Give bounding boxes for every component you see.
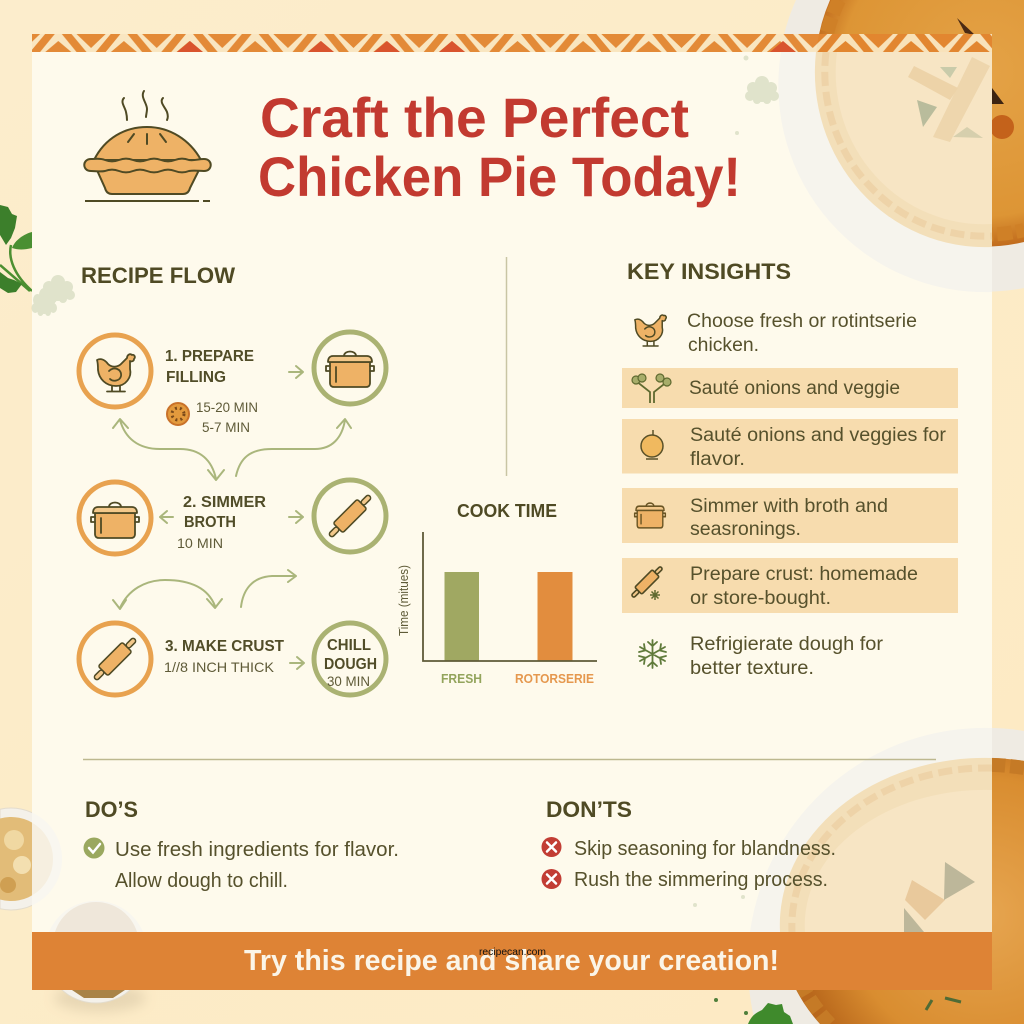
panel: don'ts: DON’TS [546,797,632,822]
icon: steaming pie [84,91,211,201]
insight 2: vegetables [622,368,958,408]
step 1: prepare filling: FILLING [166,369,226,386]
insight 1: chicken: chicken. [688,335,759,356]
step 1: prepare filling: 5-7 MIN [202,419,250,435]
photo: cilantro sprigs [0,205,793,1024]
vertical divider [506,257,508,476]
step 2: simmer broth: 10 MIN [177,535,223,551]
step 2: simmer broth: 2. SIMMER [183,494,266,511]
insight 3: onion: Sauté onions and veggies for [690,425,947,446]
bar chart: cook time: COOK TIME [457,501,557,521]
bar chart: cook time: ROTORSERIE [515,671,594,686]
step 2: simmer broth [79,480,386,554]
panel: do's: Allow dough to chill. [115,870,288,892]
panel: do's [84,797,399,892]
insight 5: rolling pin [622,558,958,613]
panel: don'ts [542,797,836,891]
step 3: make crust: 3. MAKE CRUST [165,638,285,655]
panel: do's: DO’S [85,797,138,822]
insight 5: rolling pin: Prepare crust: homemade [690,564,918,585]
title: Chicken Pie Today! [258,145,741,208]
bar chart: cook time: Time (mitues) [396,565,411,636]
step 2: simmer broth: BROTH [184,514,236,531]
insight 4: pot: Simmer with broth and [690,496,888,517]
step 1: prepare filling: 15-20 MIN [196,399,258,415]
heading: key insights: KEY INSIGHTS [627,259,791,284]
insight 4: pot: seasronings. [690,519,801,540]
step 3: make crust: 30 MIN [327,673,370,689]
panel: don'ts: Rush the simmering process. [574,869,828,891]
flow arrows between step 2 and 3 [113,570,296,609]
panel: don'ts: Skip seasoning for blandness. [574,838,836,860]
panel: do's: Use fresh ingredients for flavor. [115,839,399,861]
faded top right pie seen through panel [778,52,992,292]
insight 6: snowflake [639,634,884,679]
faded bottom right pie seen through panel [750,728,992,932]
flow arrows between step 1 and 2 [113,419,351,480]
step 3: make crust: CHILL [327,637,371,654]
insight 3: onion: flavor. [690,449,745,470]
horizontal divider [83,758,936,760]
step 3: make crust: 1//8 INCH THICK [164,659,275,675]
insight 4: pot [622,488,958,543]
bar chart: cook time: FRESH [441,671,482,686]
insight 5: rolling pin: or store-bought. [690,588,831,609]
insight 1: chicken [635,311,917,356]
faded bowls seen through panel [32,812,143,932]
call to action banner [32,932,992,990]
insight 3: onion [622,419,958,474]
photo: bowls of ingredients [0,808,147,1012]
title [258,86,741,208]
zigzag border [32,34,992,52]
step 3: make crust [79,623,386,695]
title: Craft the Perfect [260,86,689,149]
call to action banner: Try this recipe and share your creation! [244,945,779,977]
photo: bottom right pie on plate [748,728,1024,1024]
insight 6: snowflake: better texture. [690,658,814,679]
heading: recipe flow: RECIPE FLOW [81,263,235,288]
step 1: prepare filling: 1. PREPARE [165,348,254,365]
insight 1: chicken: Choose fresh or rotintserie [687,311,917,332]
insight 2: vegetables: Sauté onions and veggie [689,378,900,399]
insight 6: snowflake: Refrigierate dough for [690,634,884,655]
step 3: make crust: DOUGH [324,656,377,673]
step 1: prepare filling [79,332,386,435]
photo: top right pie on plate [778,0,1024,292]
bar chart: cook time [396,501,597,686]
faded herb decoration [32,56,779,907]
watermark: recipecan.com [479,947,546,958]
